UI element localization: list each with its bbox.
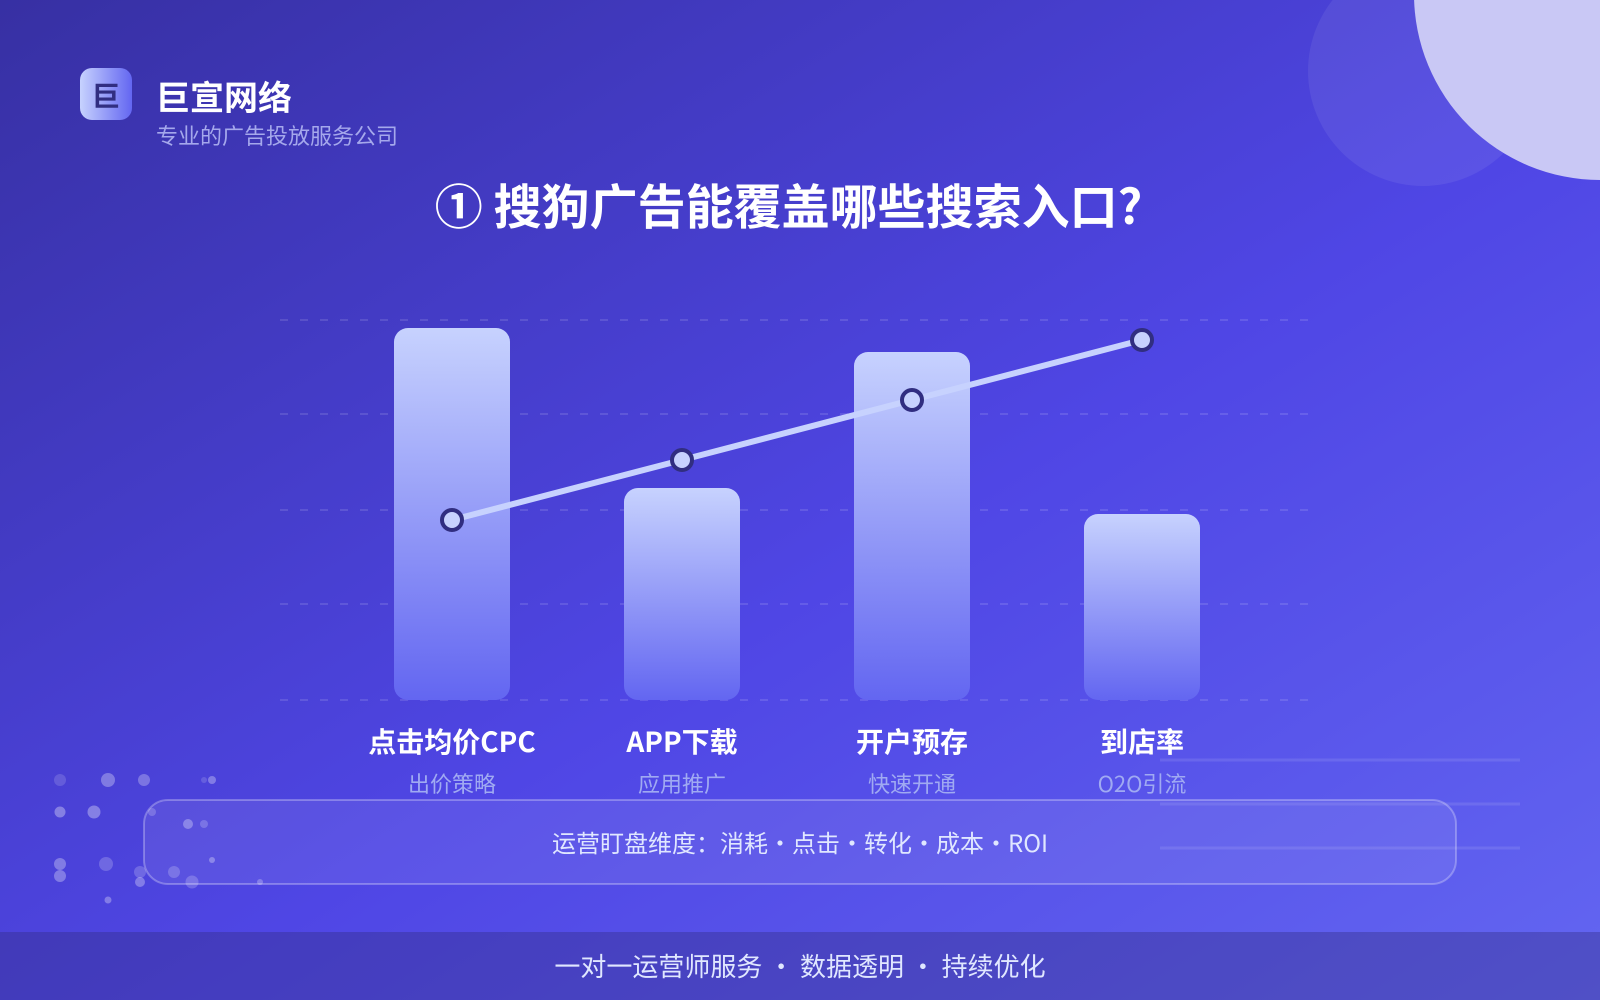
trend points (442, 330, 1152, 530)
bar: 到店率 (1084, 514, 1200, 700)
footer bar: 一对一运营师服务 ・ 数据透明 ・ 持续优化 (554, 947, 1046, 984)
decorative lines (1160, 760, 1520, 848)
label: 到店率 (1098, 721, 1186, 799)
label: 开户预存: 快速开通 (868, 767, 956, 799)
bar: 开户预存 (854, 352, 970, 700)
label: APP下载: 应用推广 (638, 767, 726, 799)
brand tagline: 专业的广告投放服务公司 (156, 119, 398, 151)
label: 开户预存: 开户预存 (856, 721, 968, 761)
label: APP下载: APP下载 (625, 721, 738, 761)
label: 到店率: O2O引流 (1098, 767, 1186, 799)
decorative dots (54, 773, 263, 904)
label: 到店率: 到店率 (1100, 721, 1184, 761)
trend line (452, 340, 1142, 520)
logo icon (80, 68, 132, 120)
bar: APP下载 (624, 488, 740, 700)
chart: bars with trend line (280, 320, 1310, 700)
logo icon: 巨 (92, 75, 120, 115)
callout: monitoring dimensions (144, 800, 1456, 884)
label: 点击均价CPC: 出价策略 (408, 767, 496, 799)
decorative circle: faint (1308, 0, 1538, 186)
label: APP下载 (625, 721, 738, 799)
title: ① 搜狗广告能覆盖哪些搜索入口? (435, 168, 1142, 238)
label: 点击均价CPC: 点击均价CPC (368, 721, 536, 761)
label: 点击均价CPC (368, 721, 536, 799)
footer bar (0, 932, 1600, 1000)
bar: 点击均价CPC (394, 328, 510, 700)
callout: monitoring dimensions: 运营盯盘维度：消耗・点击・转化・成本・ROI (552, 824, 1048, 859)
label: 开户预存 (856, 721, 968, 799)
brand name: 巨宣网络 (156, 71, 292, 120)
decorative circle: light corner (1414, 0, 1600, 180)
